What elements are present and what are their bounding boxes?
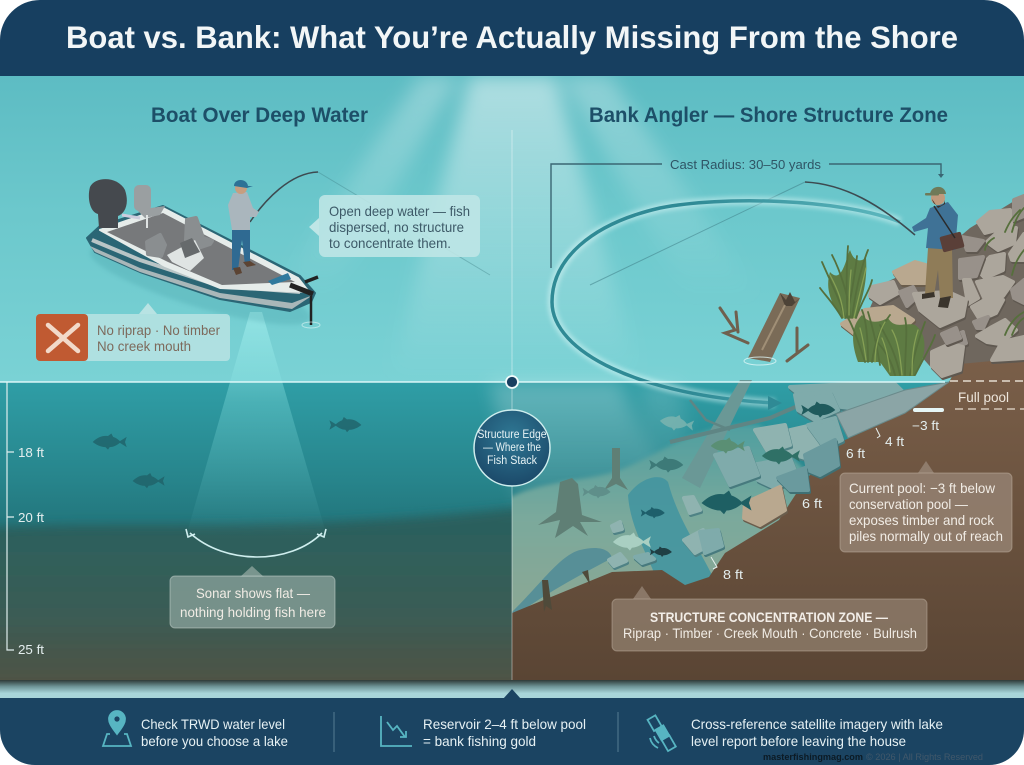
depth labels: bank: Full pool xyxy=(958,390,1009,405)
water surface background xyxy=(0,76,1024,382)
callout: no riprap: No riprap · No timber xyxy=(97,322,220,338)
title: Boat vs. Bank: What You’re Actually Missing From the Shore xyxy=(66,19,958,55)
icon: satellite xyxy=(648,715,676,751)
badge: structure edge: — Where the xyxy=(483,442,541,454)
trolling motor xyxy=(290,277,320,328)
bulrush patch, right of rocks xyxy=(985,208,1024,335)
shore soil cross-section xyxy=(512,358,1024,680)
callout: open deep water: Open deep water — fish xyxy=(329,203,470,219)
underwater layer xyxy=(0,382,946,536)
underwater rays xyxy=(486,376,688,494)
deck xyxy=(107,213,295,285)
cast radius ring xyxy=(552,201,900,410)
rod xyxy=(805,182,915,235)
motor xyxy=(89,179,127,228)
depth labels: bank: 8 ft xyxy=(723,568,744,582)
text: cross-reference xyxy=(691,716,943,749)
callout: open deep water: dispersed, no structure xyxy=(329,219,464,235)
boat xyxy=(84,172,490,340)
shore rock mass xyxy=(842,195,1024,376)
depth scale: 20 ft xyxy=(18,511,45,525)
jacket xyxy=(912,202,958,250)
badge: structure edge: Structure Edge xyxy=(478,429,546,441)
callout: sonar shows flat xyxy=(170,566,335,628)
sonar arc xyxy=(186,529,326,557)
dispersed fish, left xyxy=(93,417,361,488)
text: cross-reference: level report before leaving the house xyxy=(691,733,906,749)
callout: current pool xyxy=(840,461,1012,552)
text: check water level xyxy=(141,716,288,749)
sonar beam xyxy=(194,312,318,508)
callout: structure concentration zone: STRUCTURE CONCENTRATION ZONE — xyxy=(650,609,888,625)
electronics xyxy=(268,273,291,285)
copyright: © 2026 | All Rights Reserved xyxy=(866,752,983,763)
depth labels: bank xyxy=(711,390,1024,582)
console xyxy=(167,240,204,271)
text: reservoir: = bank fishing gold xyxy=(423,733,536,749)
angler pants xyxy=(232,228,250,270)
submerged tree stumps xyxy=(538,448,628,612)
callout: no riprap xyxy=(36,303,230,361)
center divider xyxy=(511,130,513,680)
stacked fish around structure xyxy=(583,402,835,557)
driver seats xyxy=(147,218,212,256)
depth labels: bank: 6 ft xyxy=(802,497,823,511)
icon: falling chart xyxy=(381,716,412,746)
hull xyxy=(87,206,315,311)
icon: map pin xyxy=(103,711,131,746)
callout: structure concentration zone: Riprap · Timber · Creek Mouth · Concrete · Bulrush xyxy=(623,625,917,641)
footer bar xyxy=(0,689,1024,765)
submerged riprap rocks xyxy=(609,384,905,566)
bulrush reeds, upper xyxy=(820,246,872,318)
text: check water level: before you choose a lake xyxy=(141,733,288,749)
heading: bank side: Bank Angler — Shore Structure Zone xyxy=(589,104,948,127)
creek channel xyxy=(512,477,712,618)
callout: open deep water: to concentrate them. xyxy=(329,235,451,251)
callout: sonar shows flat: Sonar shows flat — xyxy=(196,585,310,601)
gunwale xyxy=(100,208,309,292)
callout: current pool: piles normally out of reach xyxy=(849,528,1003,544)
head xyxy=(931,194,945,205)
bag xyxy=(939,231,965,253)
badge: structure edge xyxy=(474,410,550,486)
text: check water level: Check TRWD water level xyxy=(141,716,285,732)
callout: current pool: Current pool: −3 ft below xyxy=(849,480,996,496)
cast radius bracket: Cast Radius: 30–50 yards xyxy=(670,157,821,172)
depth labels: bank: 6 ft xyxy=(846,447,866,461)
depth scale: 25 ft xyxy=(18,643,45,657)
underwater fallen timber xyxy=(670,380,800,488)
depth scale xyxy=(7,382,45,657)
depth labels: bank: −3 ft xyxy=(912,419,940,433)
bank angler xyxy=(805,182,965,308)
callout: no riprap: No creek mouth xyxy=(97,338,191,354)
lake bed sediment xyxy=(0,504,512,680)
badge: structure edge: Fish Stack xyxy=(487,455,537,467)
waterline xyxy=(0,381,1024,382)
header bar xyxy=(0,0,1024,76)
text: reservoir xyxy=(423,716,586,749)
rod xyxy=(250,172,318,222)
boots xyxy=(922,292,951,308)
depth labels: bank: 4 ft xyxy=(885,435,905,449)
heading: boat side: Boat Over Deep Water xyxy=(151,104,368,127)
lake shelf xyxy=(512,423,810,612)
text: reservoir: Reservoir 2–4 ft below pool xyxy=(423,716,586,732)
icon: X xyxy=(48,325,78,351)
bank casting rod line xyxy=(590,182,805,285)
faint continuing line xyxy=(318,172,490,275)
sun rays from above xyxy=(316,76,714,342)
head xyxy=(235,182,247,194)
broken timber above water xyxy=(720,292,808,365)
text: cross-reference: Cross-reference satellite imagery with lake xyxy=(691,716,943,732)
depth scale: 18 ft xyxy=(18,446,45,460)
bulrush reeds, lower xyxy=(848,310,935,376)
light band above footer xyxy=(0,680,1024,699)
callout: current pool: exposes timber and rock xyxy=(849,512,995,528)
concrete slab xyxy=(836,382,949,438)
callout: sonar shows flat: nothing holding fish here xyxy=(180,604,326,620)
cast radius bracket xyxy=(551,157,944,268)
pants xyxy=(925,248,953,298)
callout: open deep water xyxy=(309,195,480,257)
rear seat xyxy=(134,185,165,228)
angler shirt xyxy=(228,192,259,230)
callout: current pool: conservation pool — xyxy=(849,496,968,512)
copyright xyxy=(763,752,983,763)
callout: structure concentration zone xyxy=(612,586,927,651)
copyright: masterfishingmag.com xyxy=(763,752,863,763)
waterline marker xyxy=(506,376,518,388)
